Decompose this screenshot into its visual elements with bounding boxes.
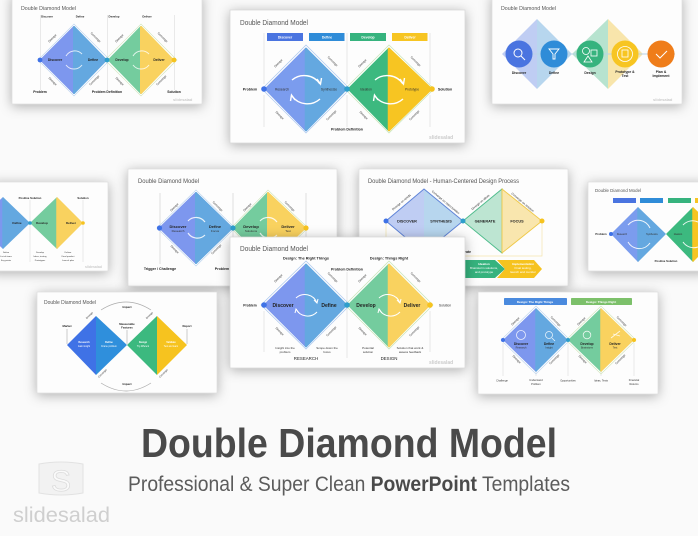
labels: Converge [155, 74, 168, 86]
labels: Converge [158, 368, 169, 379]
labels: Converge [325, 109, 338, 121]
labels: Research [617, 233, 628, 236]
labels: DISCOVER [397, 220, 417, 224]
loop arrows [290, 76, 404, 104]
labels: Final product [62, 255, 75, 258]
diamond: design: Test and learn [164, 345, 179, 348]
labels [595, 232, 683, 263]
loop arrows [188, 217, 277, 238]
labels [62, 305, 192, 386]
panel: human-centered design slide [359, 169, 568, 286]
step: define: Define [549, 71, 559, 75]
header bars [613, 198, 698, 203]
labels: Features [121, 326, 133, 330]
labels: Define [209, 224, 222, 229]
labels: Define [12, 221, 22, 225]
watermark: slidesalad [173, 97, 193, 102]
labels: Develop [356, 303, 376, 309]
diamond: research: Frame problem [101, 345, 117, 348]
labels [0, 196, 89, 262]
labels: Deliver [281, 224, 295, 229]
labels: Design: The Right Things [283, 256, 329, 260]
labels [144, 200, 296, 271]
labels: Converge [210, 243, 223, 255]
labels: Positive Solution [655, 259, 678, 263]
labels: Solution [77, 196, 89, 200]
labels: Deliver [404, 303, 420, 309]
labels: Diverge [275, 110, 285, 121]
labels: Deliver [66, 221, 77, 225]
panel: front centre slide [230, 237, 465, 368]
labels: Converge [616, 315, 628, 328]
labels: Potential [362, 346, 374, 350]
labels: Converge [88, 74, 101, 86]
chevron: implementation [497, 260, 542, 278]
labels: Converge [212, 200, 224, 213]
labels: Converge [325, 325, 338, 337]
nodes [157, 225, 309, 231]
header bars [267, 33, 428, 41]
diamond: design: Try different [137, 345, 149, 348]
labels: Define [3, 252, 10, 254]
step: prototype and test [612, 40, 638, 78]
labels: Deliver [609, 342, 621, 346]
watermark: slidesalad [85, 265, 102, 269]
header bars: Design: The Right Things [517, 300, 553, 304]
labels: Converge on solution [510, 192, 535, 213]
labels: Diverge [359, 110, 369, 121]
diamond: develop and deliver [569, 309, 633, 371]
step: design: Design [584, 71, 596, 75]
diamond: discover and define [160, 193, 232, 263]
chevron: implementation: Implementation [512, 262, 534, 266]
labels: Define [88, 58, 98, 62]
header bars: Design: Things Right [586, 300, 616, 304]
labels: Solution [439, 304, 451, 308]
slide title: Double Diamond Model [240, 246, 308, 253]
labels: Returns [629, 382, 639, 386]
labels: Diverge [273, 58, 284, 68]
diamond: discover and define [265, 265, 346, 346]
labels: Scope down the [316, 346, 338, 350]
diamond: discover and define [41, 27, 106, 93]
chevron: implementation: launch and monitor [510, 270, 536, 274]
labels: Define [544, 342, 554, 346]
panel: top-right slide [492, 0, 682, 104]
labels: Problem Definition [331, 268, 363, 272]
chevron: ideation: Brainstorm solutions, [470, 266, 498, 270]
labels: RESEARCH [294, 356, 318, 361]
labels: Converge [410, 55, 422, 68]
labels: Converge [327, 55, 339, 68]
labels: Insight into the [275, 346, 295, 350]
labels: Diverge [273, 273, 284, 283]
labels: Trigger / Challenge [144, 267, 176, 271]
labels: Diverge on needs [391, 193, 412, 211]
slide title: Double Diamond Model [595, 188, 641, 194]
labels: Converge [90, 31, 102, 44]
labels: Diverge [85, 310, 94, 320]
labels: Ideas, Tests [594, 378, 609, 382]
diamond: develop and deliver [667, 208, 698, 261]
labels: Challenge [496, 378, 508, 382]
labels: Discover [41, 14, 54, 18]
labels: Opportunities [560, 378, 576, 382]
guide lines [160, 193, 306, 264]
labels: FOCUS [510, 220, 524, 224]
labels: Test [613, 346, 618, 350]
labels: Prototype [405, 88, 419, 92]
labels: Define [321, 303, 337, 309]
watermark: slidesalad [429, 360, 453, 366]
labels: DESIGN [381, 356, 397, 361]
labels: Define [76, 14, 85, 18]
labels: Deliver [142, 14, 153, 18]
slide title: Double Diamond Model [138, 178, 199, 185]
labels: Diverge [170, 244, 180, 255]
guide lines [264, 272, 430, 358]
diamond: research: Gain insight [78, 345, 90, 348]
labels: Synthesize [646, 233, 659, 236]
labels: Problem [33, 90, 47, 94]
labels: Ideation [674, 233, 683, 236]
chevron: ideation [465, 260, 505, 278]
guide lines [30, 200, 83, 262]
labels [243, 256, 451, 361]
labels: Problem [215, 267, 229, 271]
labels: Diverge [357, 58, 368, 68]
diamond: design: Validate [166, 341, 176, 344]
diamond: discover and synthesis [386, 189, 463, 253]
diamond: develop and deliver [109, 27, 173, 93]
diamond: develop and deliver [349, 49, 431, 130]
labels: Iterate [461, 250, 471, 254]
logo: slidesalad icon: S [51, 465, 71, 498]
guide lines [40, 15, 174, 90]
diamond: discover and define [266, 49, 346, 130]
labels: Solutions [245, 229, 258, 233]
labels: Measurable [119, 322, 135, 326]
panel: top-left slide [12, 0, 202, 104]
labels: Diverge [242, 202, 253, 212]
labels: Understand [529, 378, 543, 382]
labels: Develop [36, 221, 48, 225]
diamond: research: Research [78, 341, 90, 344]
chevron: ideation: Ideation [478, 262, 490, 266]
diamond outlines [262, 45, 434, 133]
diamond outlines [157, 190, 308, 266]
diamond: develop and deliver [31, 198, 82, 248]
labels: Diverge [145, 310, 154, 320]
diamond: research [67, 316, 127, 375]
feedback line [386, 221, 542, 256]
labels: List of items [0, 255, 13, 258]
header bars [504, 298, 632, 305]
diamond: develop and deliver [234, 193, 305, 263]
nodes [261, 302, 433, 308]
labels: Diverge [47, 33, 58, 43]
diamond: discover and define [612, 208, 665, 261]
labels: Problem [595, 232, 607, 236]
panel: bottom-left slide [37, 292, 217, 393]
slide title: Double Diamond Model [21, 6, 76, 12]
labels: Diverge [275, 326, 285, 337]
labels: Diverge [510, 316, 521, 326]
labels: Diverge [578, 354, 588, 365]
labels: Ideas, testing [33, 255, 47, 258]
labels: solution [363, 350, 374, 354]
labels: Research [275, 88, 289, 92]
logo: slidesalad icon [39, 462, 83, 498]
labels: Diverge [48, 76, 58, 87]
watermark: slidesalad [429, 135, 453, 141]
labels: assess feedback [399, 350, 422, 354]
pale diamonds [502, 19, 643, 89]
nodes [261, 86, 435, 92]
labels [391, 189, 535, 254]
panel: top-centre slide [230, 10, 465, 143]
labels [496, 315, 640, 386]
labels: Diverge [169, 202, 180, 212]
panel: middle-left slide [128, 169, 337, 286]
step: design [576, 40, 604, 75]
labels: Problem [531, 382, 541, 386]
labels: Converge on opportunities [431, 189, 461, 215]
nodes [501, 338, 636, 342]
labels: Solution [167, 90, 181, 94]
labels: Discover [514, 342, 529, 346]
labels: Converge [157, 31, 169, 44]
panel: bottom-right slide [478, 292, 658, 394]
step: discover: Discover [512, 71, 527, 75]
slide title: Double Diamond Model [44, 300, 96, 306]
diamond: cropped define half [0, 198, 29, 248]
loop arrows [628, 220, 698, 249]
step: define [540, 40, 568, 75]
step: discover [506, 40, 532, 75]
labels: Solution that work & [397, 346, 423, 350]
step: plan and implement: Plan & [656, 70, 667, 74]
labels: Deliver [65, 251, 72, 254]
labels: Market [62, 324, 72, 328]
header bars: Define [322, 36, 332, 40]
labels: Research [516, 346, 527, 350]
slide title: Double Diamond Model [501, 6, 556, 12]
labels: Converge [284, 200, 296, 213]
panel: middle-right cropped slide [588, 182, 698, 271]
impact arcs [101, 302, 151, 391]
loop arrows [295, 295, 401, 316]
step: prototype and test: Test [622, 74, 629, 78]
labels: Impact [122, 382, 132, 386]
watermark: slidesalad [653, 97, 673, 102]
labels: Ideation [360, 88, 372, 92]
labels: Converge [410, 271, 422, 284]
labels: Develop [243, 224, 259, 229]
guide lines [503, 343, 634, 376]
labels: Focus [211, 229, 220, 233]
labels: Problem Definition [331, 128, 363, 132]
labels: focus [323, 350, 331, 354]
labels: Diverge on ideas [470, 193, 491, 211]
diamond: generate and focus [463, 189, 542, 253]
labels: Diverge [114, 33, 125, 43]
labels: Discover [170, 224, 187, 229]
labels: Develop [115, 58, 129, 62]
chevron: ideation: and prototype [475, 270, 493, 274]
header bars: Deliver [404, 36, 416, 40]
step: plan and implement: Implement [653, 74, 670, 78]
diamond outlines [38, 24, 177, 96]
labels: problem [280, 350, 291, 354]
labels: Financial [629, 378, 640, 382]
labels: Test [285, 229, 291, 233]
header bars: Discover [278, 36, 293, 40]
labels: Develop [109, 14, 120, 18]
labels [243, 55, 452, 132]
header bars: Develop [361, 36, 375, 40]
labels: Converge [408, 109, 421, 121]
labels: Diverge [512, 354, 522, 365]
labels: Diverge [576, 316, 587, 326]
labels: Impact [122, 305, 132, 309]
labels: Design: Things Right [370, 256, 409, 260]
labels: Insight [545, 346, 553, 350]
subtitle: Professional & Super Clean PowerPoint Templates [128, 473, 570, 496]
labels: Synthesize [321, 88, 337, 92]
labels: Deliver [153, 58, 165, 62]
labels: Problem [243, 88, 257, 92]
labels: Positive Solution [19, 196, 42, 200]
labels: Diverge [115, 76, 125, 87]
nodes [384, 218, 544, 224]
labels: Converge [614, 353, 627, 365]
nodes [38, 58, 176, 62]
labels: Converge [97, 368, 108, 379]
labels: Problem Definition [92, 90, 122, 94]
connector line [505, 53, 675, 55]
labels: Research [172, 229, 185, 233]
input lines [67, 329, 187, 344]
labels: Launch plan [62, 260, 75, 262]
labels: Converge [327, 271, 339, 284]
labels: Develop [580, 342, 594, 346]
step: plan and implement [648, 40, 674, 78]
diamond: discover and define [504, 309, 567, 371]
slide title: Double Diamond Model [240, 20, 308, 27]
diamond outlines [261, 261, 433, 349]
labels: Diverge [357, 273, 368, 283]
panel: middle-left cropped slide [0, 182, 108, 271]
diamond outlines [501, 306, 636, 374]
chevron: implementation: Final testing, [514, 266, 532, 270]
labels: Discover [272, 303, 294, 309]
labels: Diverge [358, 326, 368, 337]
icons [516, 330, 620, 341]
labels: Develop [36, 252, 45, 254]
labels [33, 14, 181, 94]
logo: slidesalad wordmark: slidesalad [13, 504, 110, 527]
guide lines [264, 33, 430, 127]
labels: Prototypes [35, 259, 46, 262]
labels: Key points [1, 259, 12, 262]
diamond: research: Define [105, 341, 113, 344]
loop arrows [66, 51, 149, 69]
labels: Report [182, 324, 192, 328]
labels: Converge [548, 353, 561, 365]
labels: Brainstorm [581, 346, 593, 350]
step: prototype and test: Prototype & [615, 70, 635, 74]
labels: Converge [408, 325, 421, 337]
labels: Converge [550, 315, 562, 328]
nodes [28, 221, 85, 225]
diamond: design [127, 316, 187, 375]
diamond: develop and deliver [349, 265, 429, 346]
labels: Discover [48, 58, 63, 62]
slide title: Double Diamond Model - Human-Centered Design Process [368, 178, 519, 185]
labels: Solution [438, 88, 452, 92]
diamond: design: Design [139, 341, 148, 344]
labels: GENERATE [475, 220, 496, 224]
labels: Problem [243, 304, 257, 308]
main title: Double Diamond Model [141, 420, 557, 466]
labels: SYNTHESIS [430, 220, 452, 224]
